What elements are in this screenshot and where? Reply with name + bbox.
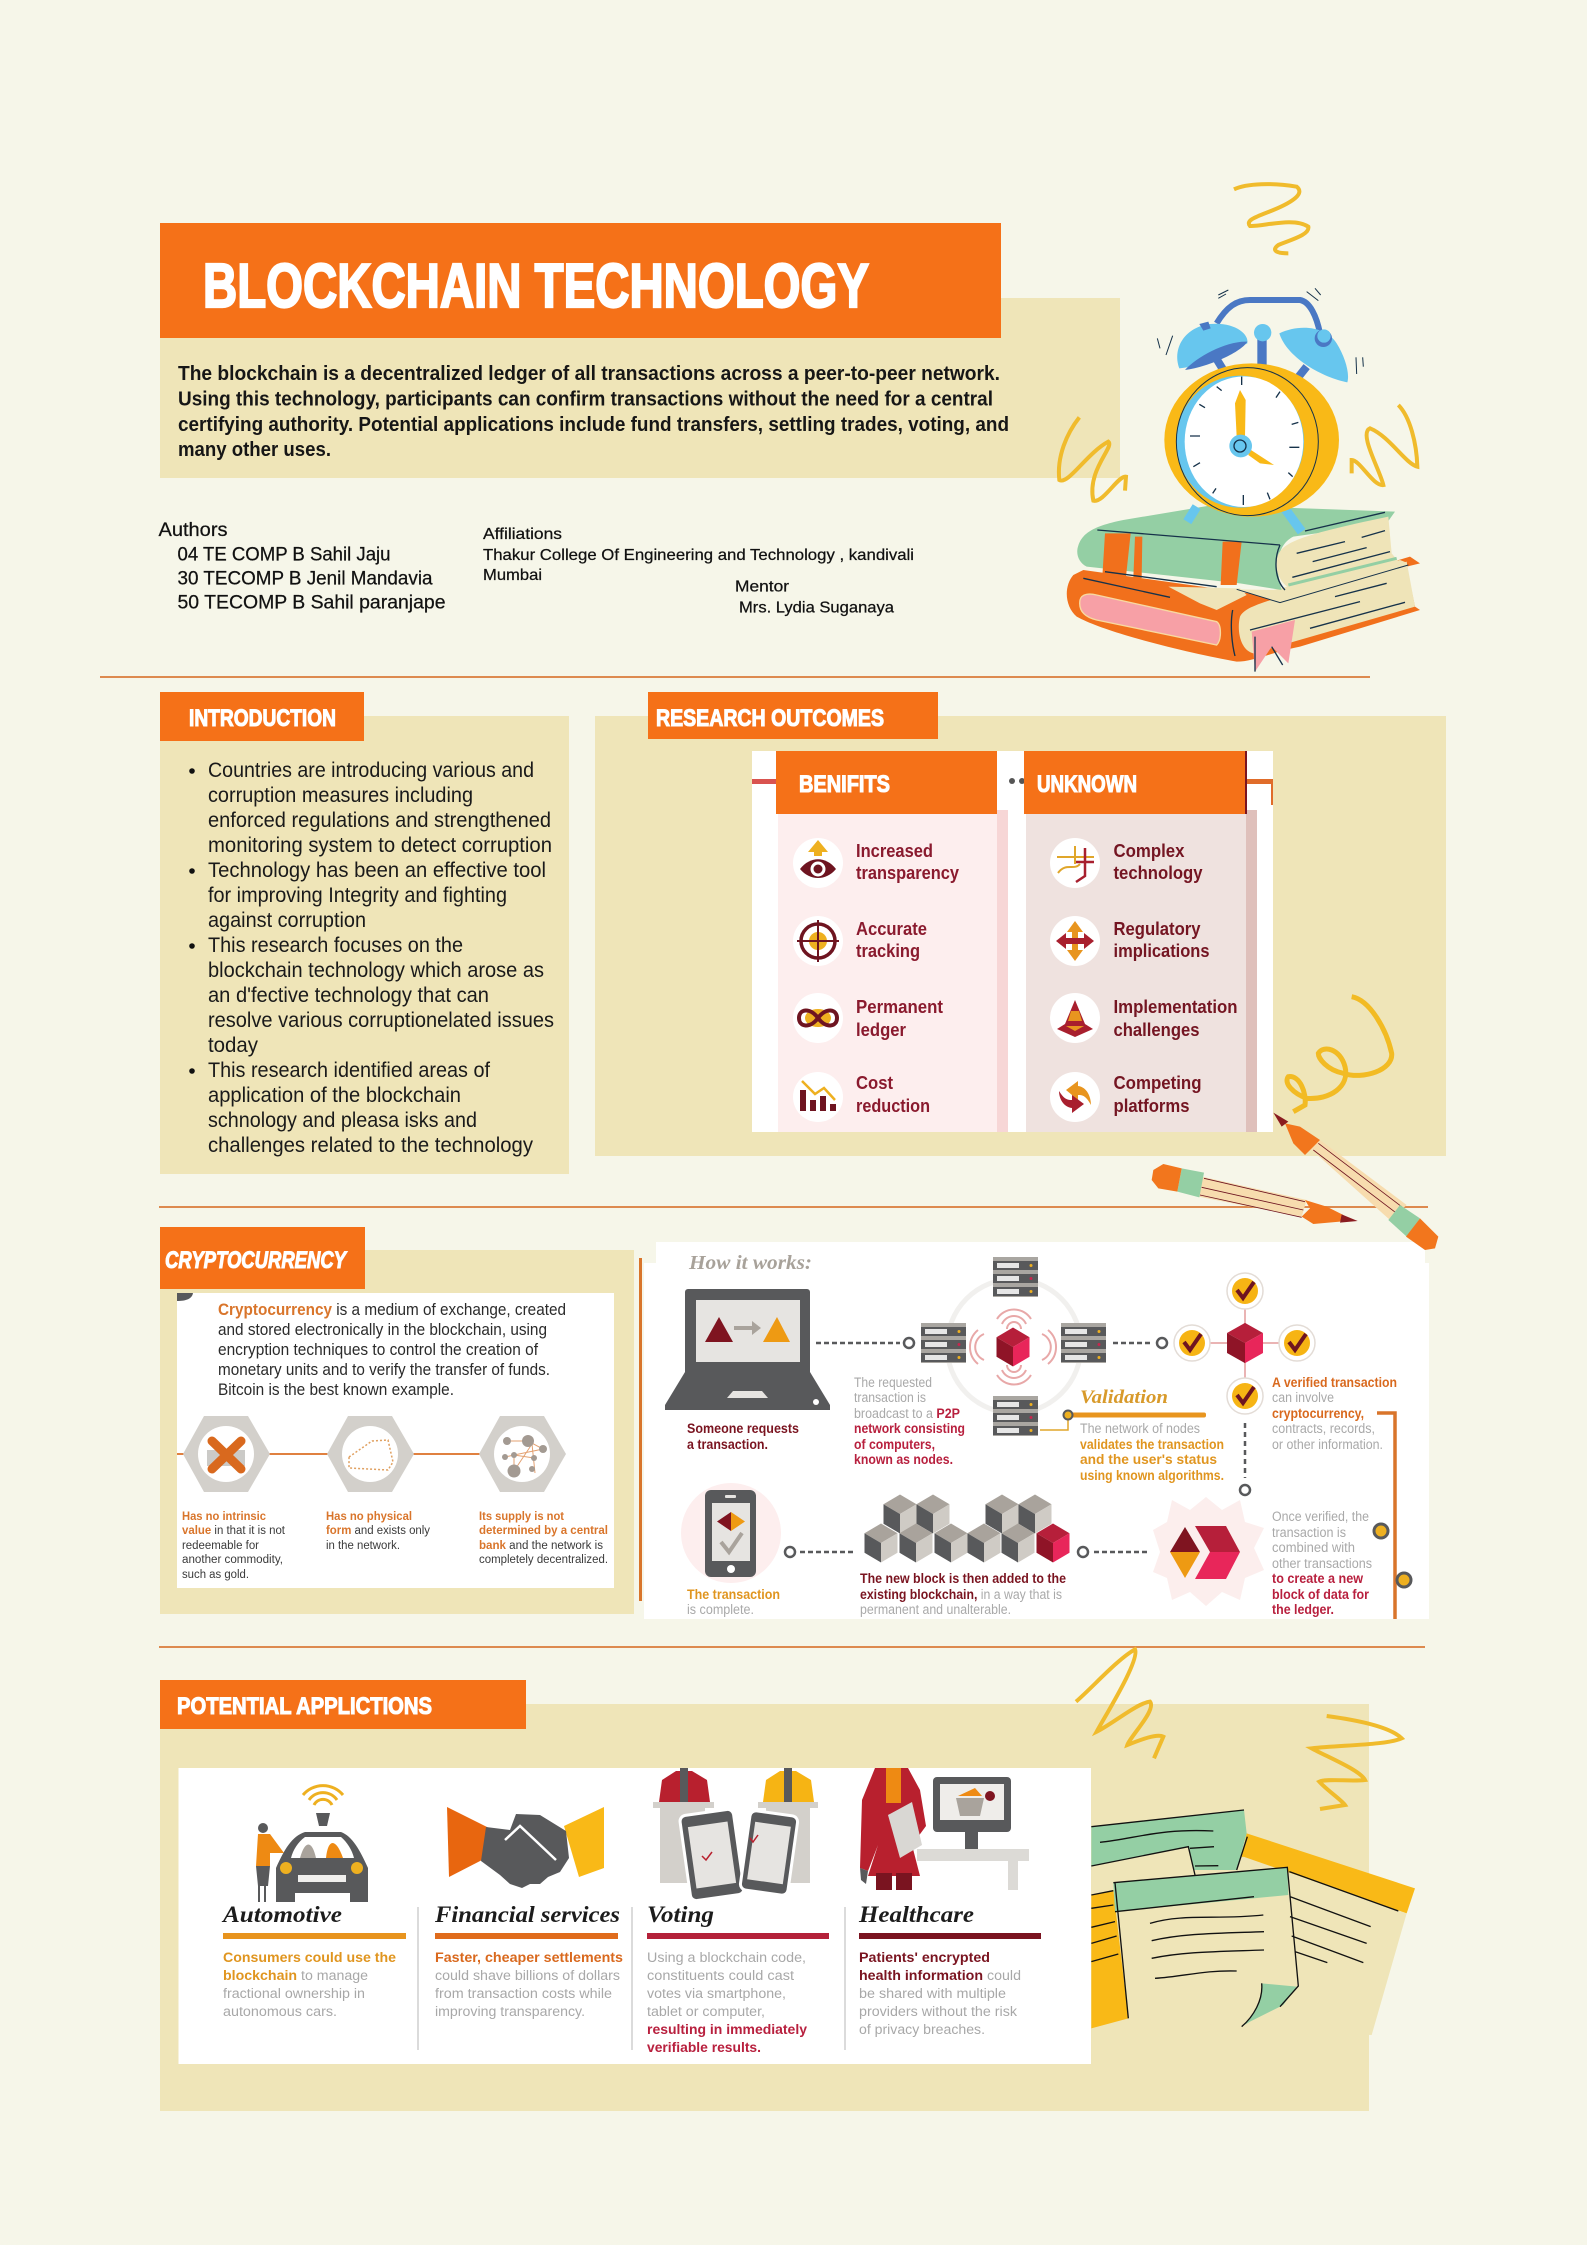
divider [159,1206,1428,1208]
icon: competing platforms [1050,1072,1100,1122]
step: request: a transaction. [687,1437,768,1452]
icon: phone [681,1483,781,1583]
introduction bullets: an d'fective technology that can [208,984,489,1007]
caption: no central bank: completely decentralized. [479,1554,608,1566]
step: verified transaction: contracts, records, [1272,1421,1375,1436]
step: verified transaction: A verified transaction [1272,1375,1397,1390]
scribble: left [1076,1649,1163,1758]
icon: financial services handshake [447,1807,604,1888]
introduction bullets: This research focuses on the [208,934,463,957]
scribble [1287,997,1392,1112]
cryptocurrency heading: CRYPTOCURRENCY [165,1247,348,1274]
step: broadcast [854,1375,965,1467]
step: verified transaction: or other information. [1272,1437,1383,1452]
introduction bullets: monitoring system to detect corruption [208,834,552,857]
application: healthcare: be shared with multiple [859,1986,1006,2001]
application: healthcare: Healthcare [858,1902,974,1927]
cryptocurrency definition: Cryptocurrency is a medium of exchange, created [218,1300,566,1319]
cryptocurrency definition: encryption techniques to control the creation of [218,1340,538,1359]
research outcomes heading [648,692,938,739]
application: voting: resulting in immediately [647,2022,808,2037]
application: financial services: could shave billions of dollars [435,1968,620,1983]
step: broadcast: of computers, [854,1437,935,1452]
step: broadcast: The requested [854,1375,932,1390]
abstract text [178,363,1009,461]
icon: no intrinsic value [183,1416,270,1492]
application: automotive: Consumers could use the [223,1950,397,1965]
benefits labels: Accurate [856,919,927,939]
benefits heading [776,751,997,814]
step: broadcast: known as nodes. [854,1452,953,1467]
step: validation [1040,1387,1224,1483]
icon: accurate tracking [793,916,843,966]
application: automotive: Automotive [221,1902,342,1927]
arrow: new block to chain [1078,1547,1149,1557]
step: new block text: block of data for [1272,1587,1370,1602]
step: new block text [1272,1509,1372,1617]
authors: 50 TECOMP B Sahil paranjape [178,592,446,614]
step: added to chain: existing blockchain, in a way that is [860,1587,1062,1602]
step: validation: validates the transaction [1080,1437,1224,1452]
applications card [178,1768,1091,2064]
unknown labels: Complex [1114,841,1184,861]
icon: decentralized network [479,1416,566,1492]
step: validation: using known algorithms. [1080,1468,1224,1483]
arrow: network to verification [1113,1338,1167,1348]
p2p network diagram [921,1257,1106,1436]
step: new block text: combined with [1272,1540,1355,1555]
caption: no physical form: Has no physical [326,1511,412,1523]
arrow: verification to new block [1240,1423,1250,1495]
title banner [160,223,1001,338]
icon: voting [653,1768,818,1901]
cryptocurrency definition: Bitcoin is the best known example. [218,1380,454,1399]
icon: implementation challenges [1050,993,1100,1043]
icon: healthcare [860,1768,1029,1890]
introduction bullets: This research identified areas of [208,1059,490,1082]
caption: no intrinsic value: redeemable for [182,1540,259,1552]
application: healthcare: providers without the risk [859,2004,1017,2019]
research outcomes heading: RESEARCH OUTCOMES [656,705,884,732]
unknown labels: implications [1114,941,1210,961]
introduction heading: INTRODUCTION [189,705,336,732]
application: financial services: improving transparency. [435,2004,585,2019]
authors: Authors [158,520,228,541]
caption: no intrinsic value: value in that it is not [182,1525,286,1537]
unknown labels: Regulatory [1114,919,1200,939]
scribble: top [1234,184,1308,253]
step: added to chain: permanent and unalterable. [860,1602,1011,1617]
introduction bullets: Technology has been an effective tool [208,859,546,882]
unknown heading [1024,751,1247,814]
sticky notes [1091,1810,1415,2035]
abstract text: certifying authority. Potential applications include fund transfers, settling trades, voting, and [178,414,1009,436]
caption: no intrinsic value: another commodity, [182,1554,283,1566]
arrow: laptop to network [816,1338,914,1348]
pencil: diagonal [1273,1113,1438,1250]
pencil: lying [1152,1164,1358,1224]
caption: no physical form [326,1511,430,1552]
introduction bullets: enforced regulations and strengthened [208,809,551,832]
divider [159,1646,1425,1648]
icon: cost reduction [793,1072,843,1122]
introduction bullets: for improving Integrity and fighting [208,884,507,907]
books [1067,505,1420,672]
unknown labels: Implementation [1114,997,1238,1017]
introduction bullets: blockchain technology which arose as [208,959,544,982]
introduction bullets: Countries are introducing various and [208,759,534,782]
step: added to chain [860,1571,1066,1617]
application: voting: votes via smartphone, [647,1986,786,2001]
benefits labels: transparency [856,863,959,883]
icon: complex technology [1050,838,1100,888]
application: automotive [221,1902,406,2019]
unknown labels [1114,841,1238,1116]
panel: cryptocurrency [160,1227,634,1614]
application: healthcare: health information could [859,1968,1021,1983]
panel: abstract background [160,298,1120,478]
arrow: chain to completion [785,1547,853,1557]
illustration: alarm clock on books [1059,184,1420,672]
scribble: right [1352,405,1417,485]
application: voting [647,1902,829,2055]
application: financial services: from transaction costs while [435,1986,612,2001]
cryptocurrency card [177,1293,614,1588]
benefits labels: reduction [856,1096,930,1116]
step: validation: The network of nodes [1080,1421,1200,1436]
step: verified transaction [1272,1375,1397,1452]
cryptocurrency definition [218,1300,566,1399]
application: healthcare [858,1902,1041,2037]
alarm clock [1157,288,1363,532]
step: broadcast: transaction is [854,1390,926,1405]
step: added to chain: The new block is then added to the [860,1571,1066,1586]
icon: no physical form [327,1416,414,1492]
application: financial services [434,1902,623,2019]
icon: automotive [256,1786,368,1902]
step: validation: Validation [1080,1387,1168,1408]
authors: 30 TECOMP B Jenil Mandavia [178,568,433,590]
application: automotive: blockchain to manage [223,1968,368,1983]
step: verified transaction: cryptocurrency, [1272,1406,1364,1421]
benefits labels: tracking [856,941,920,961]
application: financial services: Faster, cheaper settlements [435,1950,623,1965]
step: new block text: transaction is [1272,1525,1346,1540]
panel: introduction [160,692,569,1174]
benefits labels [856,841,959,1116]
application: voting: tablet or computer, [647,2004,765,2019]
application: automotive: fractional ownership in [223,1986,365,2001]
blockchain cubes [864,1494,1070,1562]
unknown labels: platforms [1114,1096,1190,1116]
introduction bullets: schnology and pleasa isks and [208,1109,477,1132]
affiliations: Thakur College Of Engineering and Technology , kandivali [483,547,914,564]
application: voting: Using a blockchain code, [647,1950,806,1965]
benefits labels: Cost [856,1073,893,1093]
application: healthcare: Patients' encrypted [859,1950,990,1965]
bracket connector [1374,1413,1411,1619]
authors: 04 TE COMP B Sahil Jaju [178,544,390,566]
mentor: Mrs. Lydia Suganaya [739,600,894,616]
application: financial services: Financial services [434,1902,620,1927]
illustration: pencils and scribble [1152,997,1438,1250]
application: voting: verifiable results. [647,2040,761,2055]
unknown labels: technology [1114,863,1202,883]
application: voting: constituents could cast [647,1968,794,1983]
verified block diagram [1174,1273,1315,1414]
step: request [687,1421,799,1452]
icon: increased transparency [793,838,843,888]
title: BLOCKCHAIN TECHNOLOGY [203,252,869,321]
caption: no central bank [479,1511,608,1566]
step: new block text: the ledger. [1272,1602,1334,1617]
caption: no intrinsic value: Has no intrinsic [182,1511,267,1523]
connector line [177,1453,480,1455]
authors [158,520,446,614]
introduction bullets: application of the blockchain [208,1084,461,1107]
cryptocurrency definition: and stored electronically in the blockchain, using [218,1320,547,1339]
caption: no intrinsic value [182,1511,286,1581]
panel: potential applications [160,1680,1369,2111]
abstract text: The blockchain is a decentralized ledger of all transactions across a peer-to-peer network. [178,363,1000,385]
column dividers [418,1907,845,2050]
benefits labels: ledger [856,1020,906,1040]
step: new block text: Once verified, the [1272,1509,1369,1524]
introduction bullets: challenges related to the technology [208,1134,533,1157]
introduction bullets: resolve various corruptionelated issues [208,1009,554,1032]
divider [100,676,1370,678]
introduction bullets: today [208,1034,258,1057]
icon: laptop [665,1289,830,1410]
icon: new data block star [1153,1497,1264,1606]
how it works heading: How it works: [688,1252,812,1274]
caption: no central bank: determined by a central [479,1525,608,1537]
step: complete [687,1587,780,1617]
application: healthcare: of privacy breaches. [859,2022,985,2037]
potential applications heading: POTENTIAL APPLICTIONS [177,1693,432,1720]
scribble: right [1312,1716,1402,1809]
caption: no intrinsic value: such as gold. [182,1569,249,1581]
panel: how it works [639,1242,1429,1619]
abstract text: many other uses. [178,439,331,461]
introduction bullets [189,759,554,1157]
step: new block text: to create a new [1272,1571,1363,1586]
introduction heading [160,692,364,741]
cryptocurrency definition: monetary units and to verify the transfer of funds. [218,1360,550,1379]
mentor [735,578,894,616]
step: complete: is complete. [687,1602,754,1617]
benefits labels: Permanent [856,997,943,1017]
caption: no central bank: Its supply is not [479,1511,564,1523]
scribble: left [1059,417,1126,501]
icon: regulatory implications [1050,916,1100,966]
application: voting: Voting [647,1902,714,1927]
illustration: notes and scribbles [1076,1649,1415,2035]
abstract text: Using this technology, participants can confirm transactions without the need for a central [178,388,993,410]
caption: no physical form: form and exists only [326,1525,430,1537]
icon: permanent ledger [793,993,843,1043]
outcomes table background [752,751,1273,1132]
affiliations: Affiliations [483,526,562,543]
step: new block text: other transactions [1272,1556,1372,1571]
affiliations [483,526,914,584]
unknown heading: UNKNOWN [1037,771,1137,798]
application: automotive: autonomous cars. [223,2004,337,2019]
caption: no physical form: in the network. [326,1540,400,1552]
benefits heading: BENIFITS [799,771,890,798]
mentor: Mentor [735,578,790,596]
decorative corner marker [177,1293,193,1301]
caption: no central bank: bank and the network is [479,1540,603,1552]
benefits labels: Increased [856,841,933,861]
unknown labels: Competing [1114,1073,1202,1093]
potential applications heading [160,1680,526,1729]
step: verified transaction: can involve [1272,1390,1334,1405]
step: broadcast: broadcast to a P2P [854,1406,960,1421]
step: complete: The transaction [687,1587,780,1602]
step: broadcast: network consisting [854,1421,965,1436]
step: validation: and the user's status [1080,1452,1217,1467]
introduction bullets: corruption measures including [208,784,473,807]
introduction bullets: against corruption [208,909,366,932]
cryptocurrency heading [160,1227,365,1289]
panel: research outcomes [595,692,1446,1156]
step: request: Someone requests [687,1421,799,1436]
unknown labels: challenges [1114,1020,1200,1040]
affiliations: Mumbai [483,567,542,584]
